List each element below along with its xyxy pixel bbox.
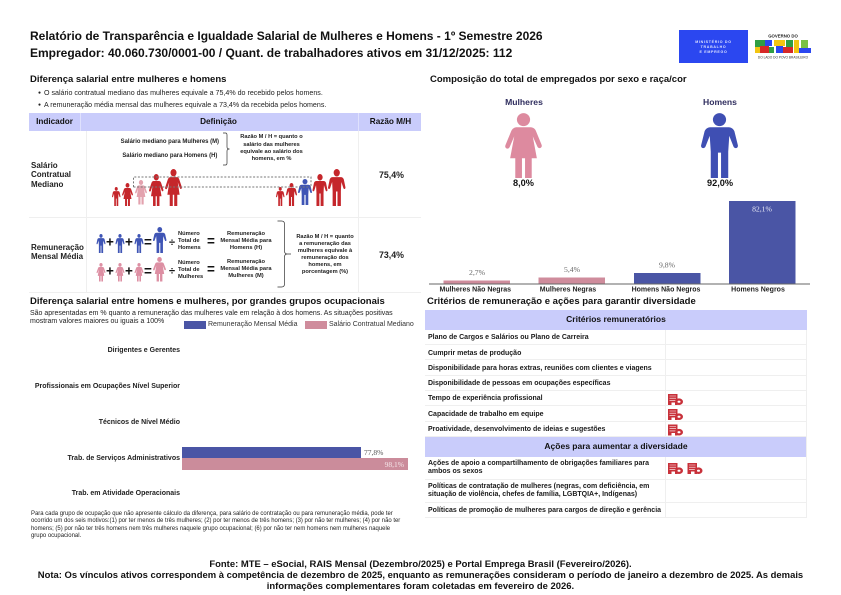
heading: grupos ocupacionais: Diferença salarial entre homens e mulheres, por grandes grupos ocupacionais bbox=[30, 296, 385, 307]
bar: remuneração 77,8% bbox=[182, 446, 361, 458]
panel: criteria table bbox=[425, 310, 807, 518]
definition: razão text: Razão M / H = quanto o bbox=[240, 134, 303, 140]
panel: criteria table: Políticas de contratação de mulheres (negras, com deficiência, em bbox=[428, 483, 649, 490]
bar chart: occupational groups: Trab. em Atividade Operacionais bbox=[72, 490, 180, 496]
bars bbox=[444, 201, 796, 284]
row label: salário contratual mediano: Salário bbox=[31, 161, 58, 170]
title: Empregador: 40.060.730/0001-00 / Quant. de trabalhadores ativos em 31/12/2025: 112 bbox=[30, 46, 512, 60]
legend: Remuneração Mensal Média bbox=[208, 321, 298, 328]
label: mulheres: Mulheres bbox=[505, 96, 543, 106]
value: 92,0%: 92,0% bbox=[707, 178, 733, 188]
row label: salário contratual mediano bbox=[31, 161, 71, 189]
source and note: Fonte: MTE – eSocial, RAIS Mensal (Dezembro/2025) e Portal Emprega Brasil (Fevereiro/2026). bbox=[209, 559, 632, 570]
definition: razão text: equivale ao salário dos bbox=[240, 149, 303, 155]
value: 98,1%: 98,1% bbox=[385, 460, 404, 469]
header: ações bbox=[425, 437, 807, 456]
equation result: homens bbox=[220, 230, 272, 251]
column chart: race and sex: 2,7% bbox=[469, 268, 486, 277]
column chart: race and sex: Homens Negros bbox=[731, 286, 785, 294]
table header: Indicador bbox=[36, 117, 73, 126]
equation text: mulheres: Total de bbox=[178, 267, 200, 273]
equation text: homens: Número bbox=[178, 230, 200, 236]
definition: salário mediano text: Salário mediano para Mulheres (M) bbox=[121, 139, 219, 145]
equation result: homens: Homens (H) bbox=[230, 245, 262, 251]
bar chart: occupational groups: Profissionais em Ocupações Nível Superior bbox=[35, 382, 180, 390]
footnote: grupo ocupacional. bbox=[31, 533, 81, 539]
bar: salário 98,1% bbox=[182, 458, 408, 470]
definition: razão remuneração bbox=[296, 234, 354, 275]
footnote bbox=[31, 510, 400, 539]
equation result: mulheres: Mulheres (M) bbox=[228, 273, 264, 279]
equation text: mulheres: Número bbox=[178, 260, 200, 266]
source and note bbox=[38, 559, 803, 592]
panel: criteria table: Disponibilidade para horas extras, reuniões com clientes e viagens bbox=[428, 365, 652, 372]
definition: salário mediano text bbox=[120, 138, 219, 159]
source and note: informações complementares foram coletadas em fevereiro de 2026. bbox=[267, 581, 574, 592]
bullet list: O salário contratual mediano das mulheres equivale a 75,4% do recebido pelos homens. bbox=[44, 89, 323, 97]
people equations: average pay: = bbox=[144, 264, 152, 278]
people equations: average pay: + bbox=[106, 234, 114, 250]
panel: indicator table bbox=[29, 113, 421, 293]
logo: Ministério do Trabalho e Emprego: MINISTÉRIO DO bbox=[695, 40, 732, 44]
people equations: average pay: + bbox=[125, 264, 133, 278]
column chart: race and sex: Mulheres Não Negras bbox=[440, 286, 511, 294]
title: Relatório de Transparência e Igualdade Salarial de Mulheres e Homens - 1º Semestre 2026 bbox=[30, 29, 543, 43]
equation result: mulheres: Remuneração bbox=[227, 259, 265, 265]
panel: criteria table: Tempo de experiência profissional bbox=[428, 395, 543, 402]
logo: Governo do Brasil: GOVERNO DO bbox=[768, 34, 798, 38]
equation result: mulheres bbox=[220, 259, 272, 279]
column chart: race and sex: Homens Não Negros bbox=[632, 286, 701, 294]
logo: Ministério do Trabalho e Emprego: E EMPREGO bbox=[699, 50, 728, 54]
panel: criteria table: Cumprir metas de produção bbox=[428, 350, 521, 357]
value: 8,0%: 8,0% bbox=[513, 178, 534, 188]
header: critérios remuneratórios bbox=[425, 310, 807, 330]
definition: razão text: salário das mulheres bbox=[243, 142, 300, 148]
panel: criteria table: ambos os sexos bbox=[428, 468, 482, 475]
people equations: average pay: ÷ bbox=[169, 266, 175, 278]
panel: criteria table: situação de violência, chefes de família, LGBTQIA+, Indígenas) bbox=[428, 491, 637, 498]
chart description: São apresentadas em % quanto a remuneração das mulheres vale em relação à dos homens. As situações positivas bbox=[30, 310, 393, 317]
people equations: average pay: + bbox=[106, 264, 114, 278]
source and note: Nota: Os vínculos ativos correspondem à competência de dezembro de 2025, enquanto as remunerações consideram o período de janeiro a dezembro de 2025. As demais bbox=[38, 570, 803, 581]
logo: Governo do Brasil: DO LADO DO POVO BRASILEIRO bbox=[758, 56, 809, 60]
equation result: mulheres: Mensal Média para bbox=[220, 266, 272, 272]
people equations: average pay: = bbox=[144, 234, 152, 250]
header: critérios remuneratórios: Critérios remuneratórios bbox=[566, 314, 666, 324]
people equations: average pay: ÷ bbox=[169, 237, 175, 249]
label: homens: Homens bbox=[703, 96, 737, 106]
definition: salário mediano text: Salário mediano para Homens (H) bbox=[122, 153, 217, 159]
bar chart: occupational groups bbox=[35, 346, 408, 496]
bar chart: occupational groups: Técnicos de Nível Médio bbox=[99, 418, 180, 426]
footnote: Para cada grupo de ocupação que não apresente cálculo da diferença, para salário de contratação ou para remuneração média, pode ter bbox=[31, 511, 393, 517]
people equations: average pay: = bbox=[207, 262, 215, 276]
value: 75,4%: 75,4% bbox=[379, 170, 404, 180]
row label: remuneração mensal média: Mensal Média bbox=[31, 252, 83, 261]
table header: Definição bbox=[200, 117, 237, 126]
bullet list bbox=[38, 89, 326, 108]
chart description: mostram valores maiores ou iguais a 100% bbox=[30, 318, 164, 325]
bullet list: ● bbox=[38, 90, 41, 96]
panel: criteria table: Ações de apoio a compartilhamento de obrigações familiares para bbox=[428, 460, 649, 467]
equation text: homens: Total de bbox=[178, 238, 200, 244]
row label: salário contratual mediano: Mediano bbox=[31, 180, 63, 189]
logo: Governo do Brasil bbox=[755, 34, 811, 60]
panel: criteria table: Plano de Cargos e Salários ou Plano de Carreira bbox=[428, 334, 589, 341]
value: 73,4%: 73,4% bbox=[379, 250, 404, 260]
definition: razão text bbox=[240, 134, 303, 162]
row label: remuneração mensal média bbox=[31, 242, 84, 261]
logo: Ministério do Trabalho e Emprego bbox=[679, 30, 748, 63]
equation text: mulheres bbox=[178, 260, 203, 280]
logos bbox=[679, 30, 811, 63]
definition: razão remuneração: remuneração dos bbox=[301, 255, 349, 261]
definition: razão remuneração: a remuneração das bbox=[299, 241, 351, 247]
equation result: homens: Mensal Média para bbox=[220, 238, 272, 244]
panel: criteria table: Proatividade, desenvolvimento de ideias e sugestões bbox=[428, 426, 605, 433]
people equations: average pay: + bbox=[125, 234, 133, 250]
panel: criteria table: Disponibilidade de pessoas em ocupações específicas bbox=[428, 380, 610, 387]
table header bbox=[29, 113, 421, 131]
definition: razão remuneração: mulheres equivale à bbox=[298, 248, 352, 254]
equation text: homens bbox=[178, 230, 201, 251]
category labels: Dirigentes e Gerentes bbox=[108, 346, 180, 354]
equation text: homens: Homens bbox=[178, 245, 201, 251]
title bbox=[30, 29, 543, 60]
chart description bbox=[30, 310, 393, 325]
column chart: race and sex: 9,8% bbox=[659, 260, 676, 270]
equation result: homens: Remuneração bbox=[227, 230, 265, 236]
row label: salário contratual mediano: Contratual bbox=[31, 170, 71, 179]
footnote: ocorrido um dos seis motivos:(1) por ter menos de três mulheres; (2) por ter menos de três homens; (3) por não ter mulheres; (4) por não ter bbox=[31, 518, 400, 524]
value: 77,8%: 77,8% bbox=[364, 448, 383, 457]
table header: Razão M/H bbox=[370, 117, 411, 126]
logo: Ministério do Trabalho e Emprego: TRABALHO bbox=[701, 45, 726, 49]
panel: criteria table: Políticas de promoção de mulheres para cargos de direção e gerência bbox=[428, 507, 661, 514]
legend bbox=[184, 320, 414, 329]
definition: razão remuneração: Razão M / H = quanto bbox=[296, 234, 354, 240]
heading: diferença salarial: Diferença salarial entre mulheres e homens bbox=[30, 74, 226, 85]
definition: razão remuneração: homens, em bbox=[308, 262, 342, 268]
heading: critérios: Critérios de remuneração e ações para garantir diversidade bbox=[427, 296, 696, 307]
heading: composição: Composição do total de empregados por sexo e raça/cor bbox=[430, 74, 687, 85]
definition: razão remuneração: porcentagem (%) bbox=[302, 269, 348, 275]
bar chart: occupational groups: Trab. de Serviços Administrativos bbox=[67, 454, 180, 462]
footnote: homens; (5) por não ter três homens nem três mulheres naquele grupo ocupacional; (6) por não ter nem homens nem mulheres naquele bbox=[31, 526, 390, 532]
definition: razão text: homens, em % bbox=[252, 156, 291, 162]
equation text: mulheres: Mulheres bbox=[178, 274, 203, 280]
bullet list: A remuneração média mensal das mulheres equivale a 73,4% da recebida pelos homens. bbox=[44, 100, 326, 108]
legend: Salário Contratual Mediano bbox=[329, 321, 414, 328]
column chart: race and sex: 5,4% bbox=[564, 265, 581, 274]
column chart: race and sex: Mulheres Negras bbox=[540, 286, 596, 294]
bullet list: ● bbox=[38, 102, 41, 108]
header: ações: Ações para aumentar a diversidade bbox=[544, 441, 688, 451]
people equations: average pay: = bbox=[207, 234, 215, 248]
column chart: race and sex: 82,1% bbox=[752, 204, 773, 214]
panel: criteria table: Capacidade de trabalho em equipe bbox=[428, 411, 544, 418]
row label: remuneração mensal média: Remuneração bbox=[31, 242, 84, 252]
